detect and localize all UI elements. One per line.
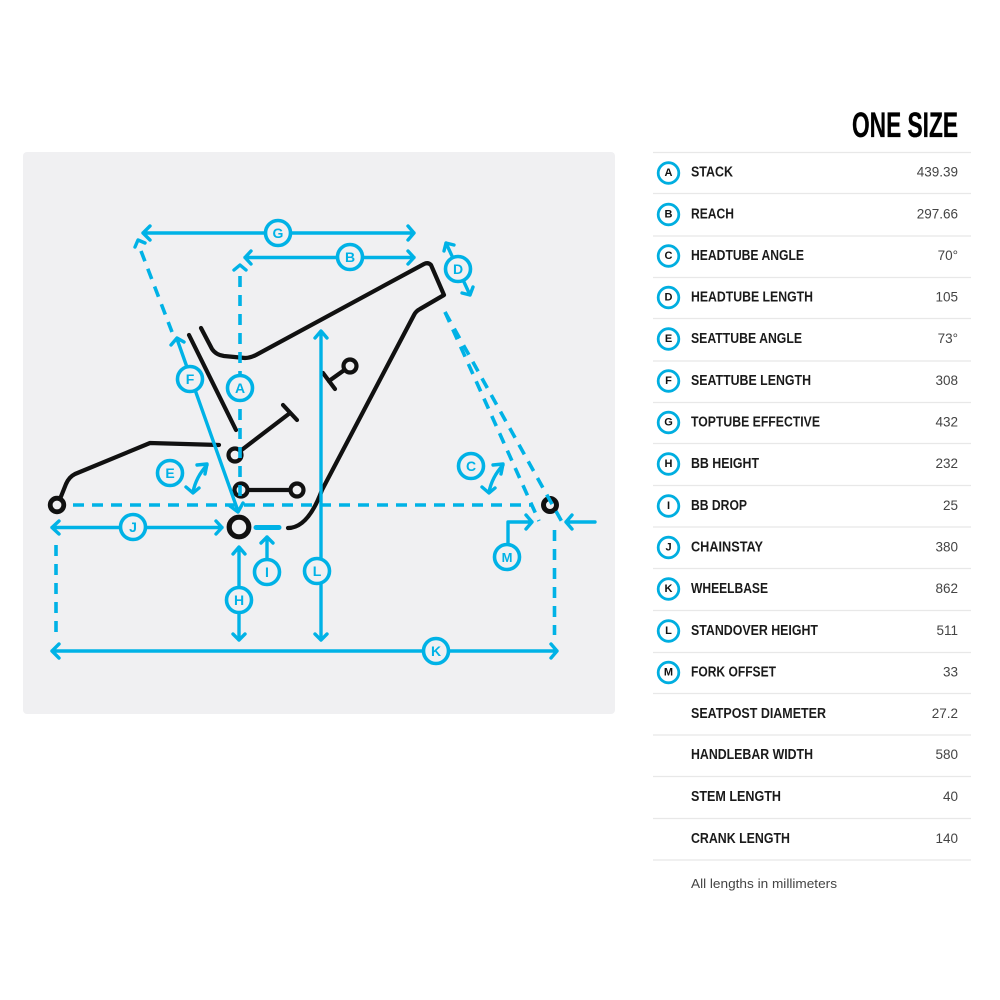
dimension M: fork offset: M: [502, 550, 512, 565]
row: BB drop: I: [667, 500, 670, 512]
row: fork offset: 33: [943, 664, 958, 680]
row: wheelbase: 862: [935, 581, 958, 596]
row: fork offset: FORK OFFSET: [691, 664, 776, 680]
row: headtube length: HEADTUBE LENGTH: [691, 290, 813, 306]
dimension M: fork offset: [494, 515, 595, 570]
row: BB height: BB HEIGHT: [691, 456, 759, 472]
dimension H: BB height: [226, 547, 252, 640]
row: fork offset: [658, 662, 958, 683]
row: seatpost diameter: SEATPOST DIAMETER: [691, 706, 826, 722]
row: chainstay: CHAINSTAY: [691, 540, 763, 556]
row: headtube angle: [658, 246, 958, 266]
row: seatpost diameter: [691, 706, 958, 722]
row: headtube angle: 70°: [938, 248, 958, 263]
dimension B: reach: B: [345, 249, 355, 265]
dimension I: BB drop: [254, 528, 280, 584]
dimension F: seattube length: [135, 240, 243, 512]
row: BB drop: [658, 496, 958, 516]
row: toptube effective: [658, 412, 958, 433]
row: reach: REACH: [691, 206, 734, 222]
row: BB height: 232: [935, 456, 958, 471]
row: stem length: [691, 789, 958, 805]
row: stack: A: [665, 167, 673, 179]
row: crank length: [691, 831, 958, 847]
row: seattube angle: E: [665, 333, 672, 345]
bike frame: [50, 263, 556, 537]
row: toptube effective: 432: [935, 414, 958, 430]
row: wheelbase: K: [665, 583, 673, 595]
dimension C: headtube angle: C: [466, 458, 476, 474]
dimension H: BB height: H: [234, 592, 244, 608]
row: seattube length: SEATTUBE LENGTH: [691, 373, 811, 389]
row: reach: B: [665, 208, 673, 220]
row: chainstay: J: [665, 542, 672, 554]
dimension A: stack: [228, 265, 252, 500]
row: headtube angle: C: [665, 250, 673, 262]
row: crank length: 140: [935, 831, 958, 846]
dimension K: wheelbase: [52, 530, 557, 664]
row: seattube length: 308: [935, 373, 958, 388]
row: standover height: L: [665, 625, 672, 637]
row: headtube length: [658, 287, 958, 308]
dimension D: headtube length: [444, 243, 562, 522]
row: seattube angle: SEATTUBE ANGLE: [691, 331, 802, 347]
row: seattube angle: [658, 329, 958, 349]
row: stem length: STEM LENGTH: [691, 789, 781, 805]
row: toptube effective: G: [664, 416, 673, 428]
row: BB drop: 25: [943, 498, 958, 513]
dimension J: chainstay: [52, 514, 222, 540]
dimension K: wheelbase: K: [431, 643, 441, 659]
dimension A: stack: A: [235, 380, 245, 396]
dimension L: standover height: [304, 331, 330, 640]
dimension E: seattube angle: [158, 460, 207, 493]
row: seatpost diameter: 27.2: [932, 706, 958, 721]
row: stack: [658, 163, 958, 183]
row: seattube angle: 73°: [938, 331, 958, 346]
table: geometry values: [653, 152, 971, 860]
dimension L: standover height: L: [313, 563, 322, 579]
row: standover height: 511: [936, 623, 958, 638]
row: BB drop: BB DROP: [691, 498, 747, 514]
row: handlebar width: [691, 747, 958, 763]
row: fork offset: M: [664, 666, 673, 678]
dimension D: headtube length: D: [453, 261, 463, 277]
row: crank length: CRANK LENGTH: [691, 831, 790, 847]
row: headtube length: D: [665, 292, 673, 304]
row: stem length: 40: [943, 789, 958, 804]
row: headtube angle: HEADTUBE ANGLE: [691, 248, 804, 264]
row: reach: 297.66: [917, 206, 958, 222]
dimension G: toptube effective: G: [273, 225, 284, 241]
row: standover height: [658, 621, 958, 641]
row: BB height: H: [665, 458, 673, 470]
row: wheelbase: WHEELBASE: [691, 581, 768, 597]
row: seattube length: F: [665, 375, 672, 387]
row: chainstay: [658, 537, 958, 558]
row: seattube length: [658, 371, 958, 391]
dimension I: BB drop: I: [265, 564, 269, 580]
row: standover height: STANDOVER HEIGHT: [691, 623, 818, 639]
dimension G: toptube effective: [143, 220, 414, 246]
row: headtube length: 105: [935, 290, 958, 304]
row: stack: 439.39: [917, 164, 958, 180]
row: stack: STACK: [691, 164, 733, 180]
dimension F: seattube length: F: [186, 371, 195, 387]
panel: geometry diagram: [23, 152, 615, 714]
dimension E: seattube angle: E: [165, 465, 175, 481]
dimension B: reach: [245, 244, 414, 270]
row: toptube effective: TOPTUBE EFFECTIVE: [691, 414, 820, 430]
row: wheelbase: [658, 579, 958, 599]
row: reach: [658, 204, 958, 225]
row: handlebar width: HANDLEBAR WIDTH: [691, 747, 813, 763]
dimension C: headtube angle: [73, 312, 539, 521]
footnote: All lengths in millimeters: [691, 876, 838, 891]
row: chainstay: 380: [935, 540, 958, 554]
row: BB height: [658, 454, 958, 474]
row: handlebar width: 580: [935, 747, 958, 762]
dimension J: chainstay: J: [129, 519, 137, 535]
